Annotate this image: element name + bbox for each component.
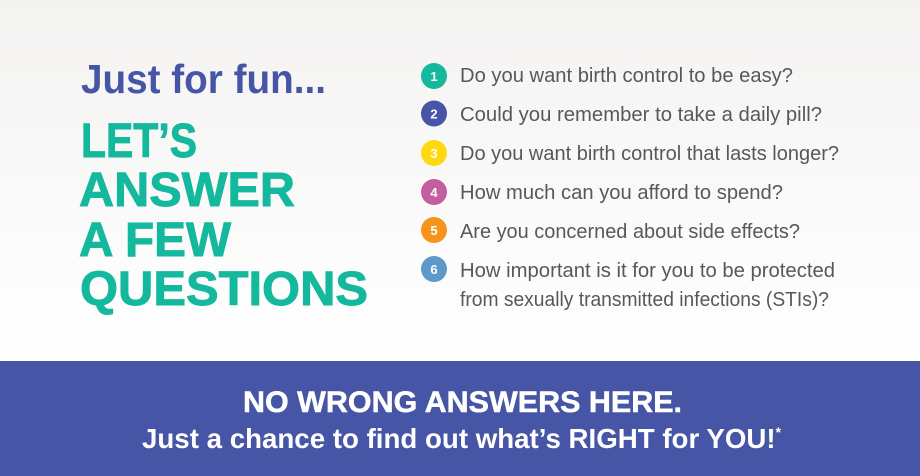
panel: question list [421, 63, 839, 311]
panel: background [0, 0, 920, 361]
banner headline: NO WRONG ANSWERS HERE. [243, 386, 682, 419]
question 1: 1 [430, 69, 438, 84]
question 2: 2 [430, 106, 438, 122]
question 6 [421, 256, 835, 311]
heading: let's answer a few questions: QUESTIONS [80, 263, 368, 316]
question 3: 3 [430, 146, 438, 161]
heading: let's answer a few questions: ANSWER [79, 164, 295, 217]
heading: let's answer a few questions: A FEW [79, 214, 232, 267]
question 5: 5 [430, 223, 438, 238]
question 3: Do you want birth control that lasts longer? [460, 142, 839, 165]
heading: let's answer a few questions [79, 115, 368, 316]
panel: bottom banner [0, 361, 920, 476]
question 6: 6 [430, 262, 438, 277]
banner subline: * [776, 424, 782, 440]
question 6: How important is it for you to be protected [460, 259, 835, 282]
banner subline: Just a chance to find out what’s RIGHT for YOU! [142, 423, 783, 454]
question 5: Are you concerned about side effects? [460, 220, 800, 243]
heading: let's answer a few questions: LET’S [81, 115, 197, 168]
question 4: How much can you afford to spend? [460, 181, 783, 204]
question 4: 4 [430, 185, 438, 200]
heading: just for fun: Just for fun... [81, 56, 326, 102]
question 6: from sexually transmitted infections (STIs)? [460, 288, 829, 311]
question 1: Do you want birth control to be easy? [460, 64, 793, 87]
question 2: Could you remember to take a daily pill? [460, 103, 822, 126]
